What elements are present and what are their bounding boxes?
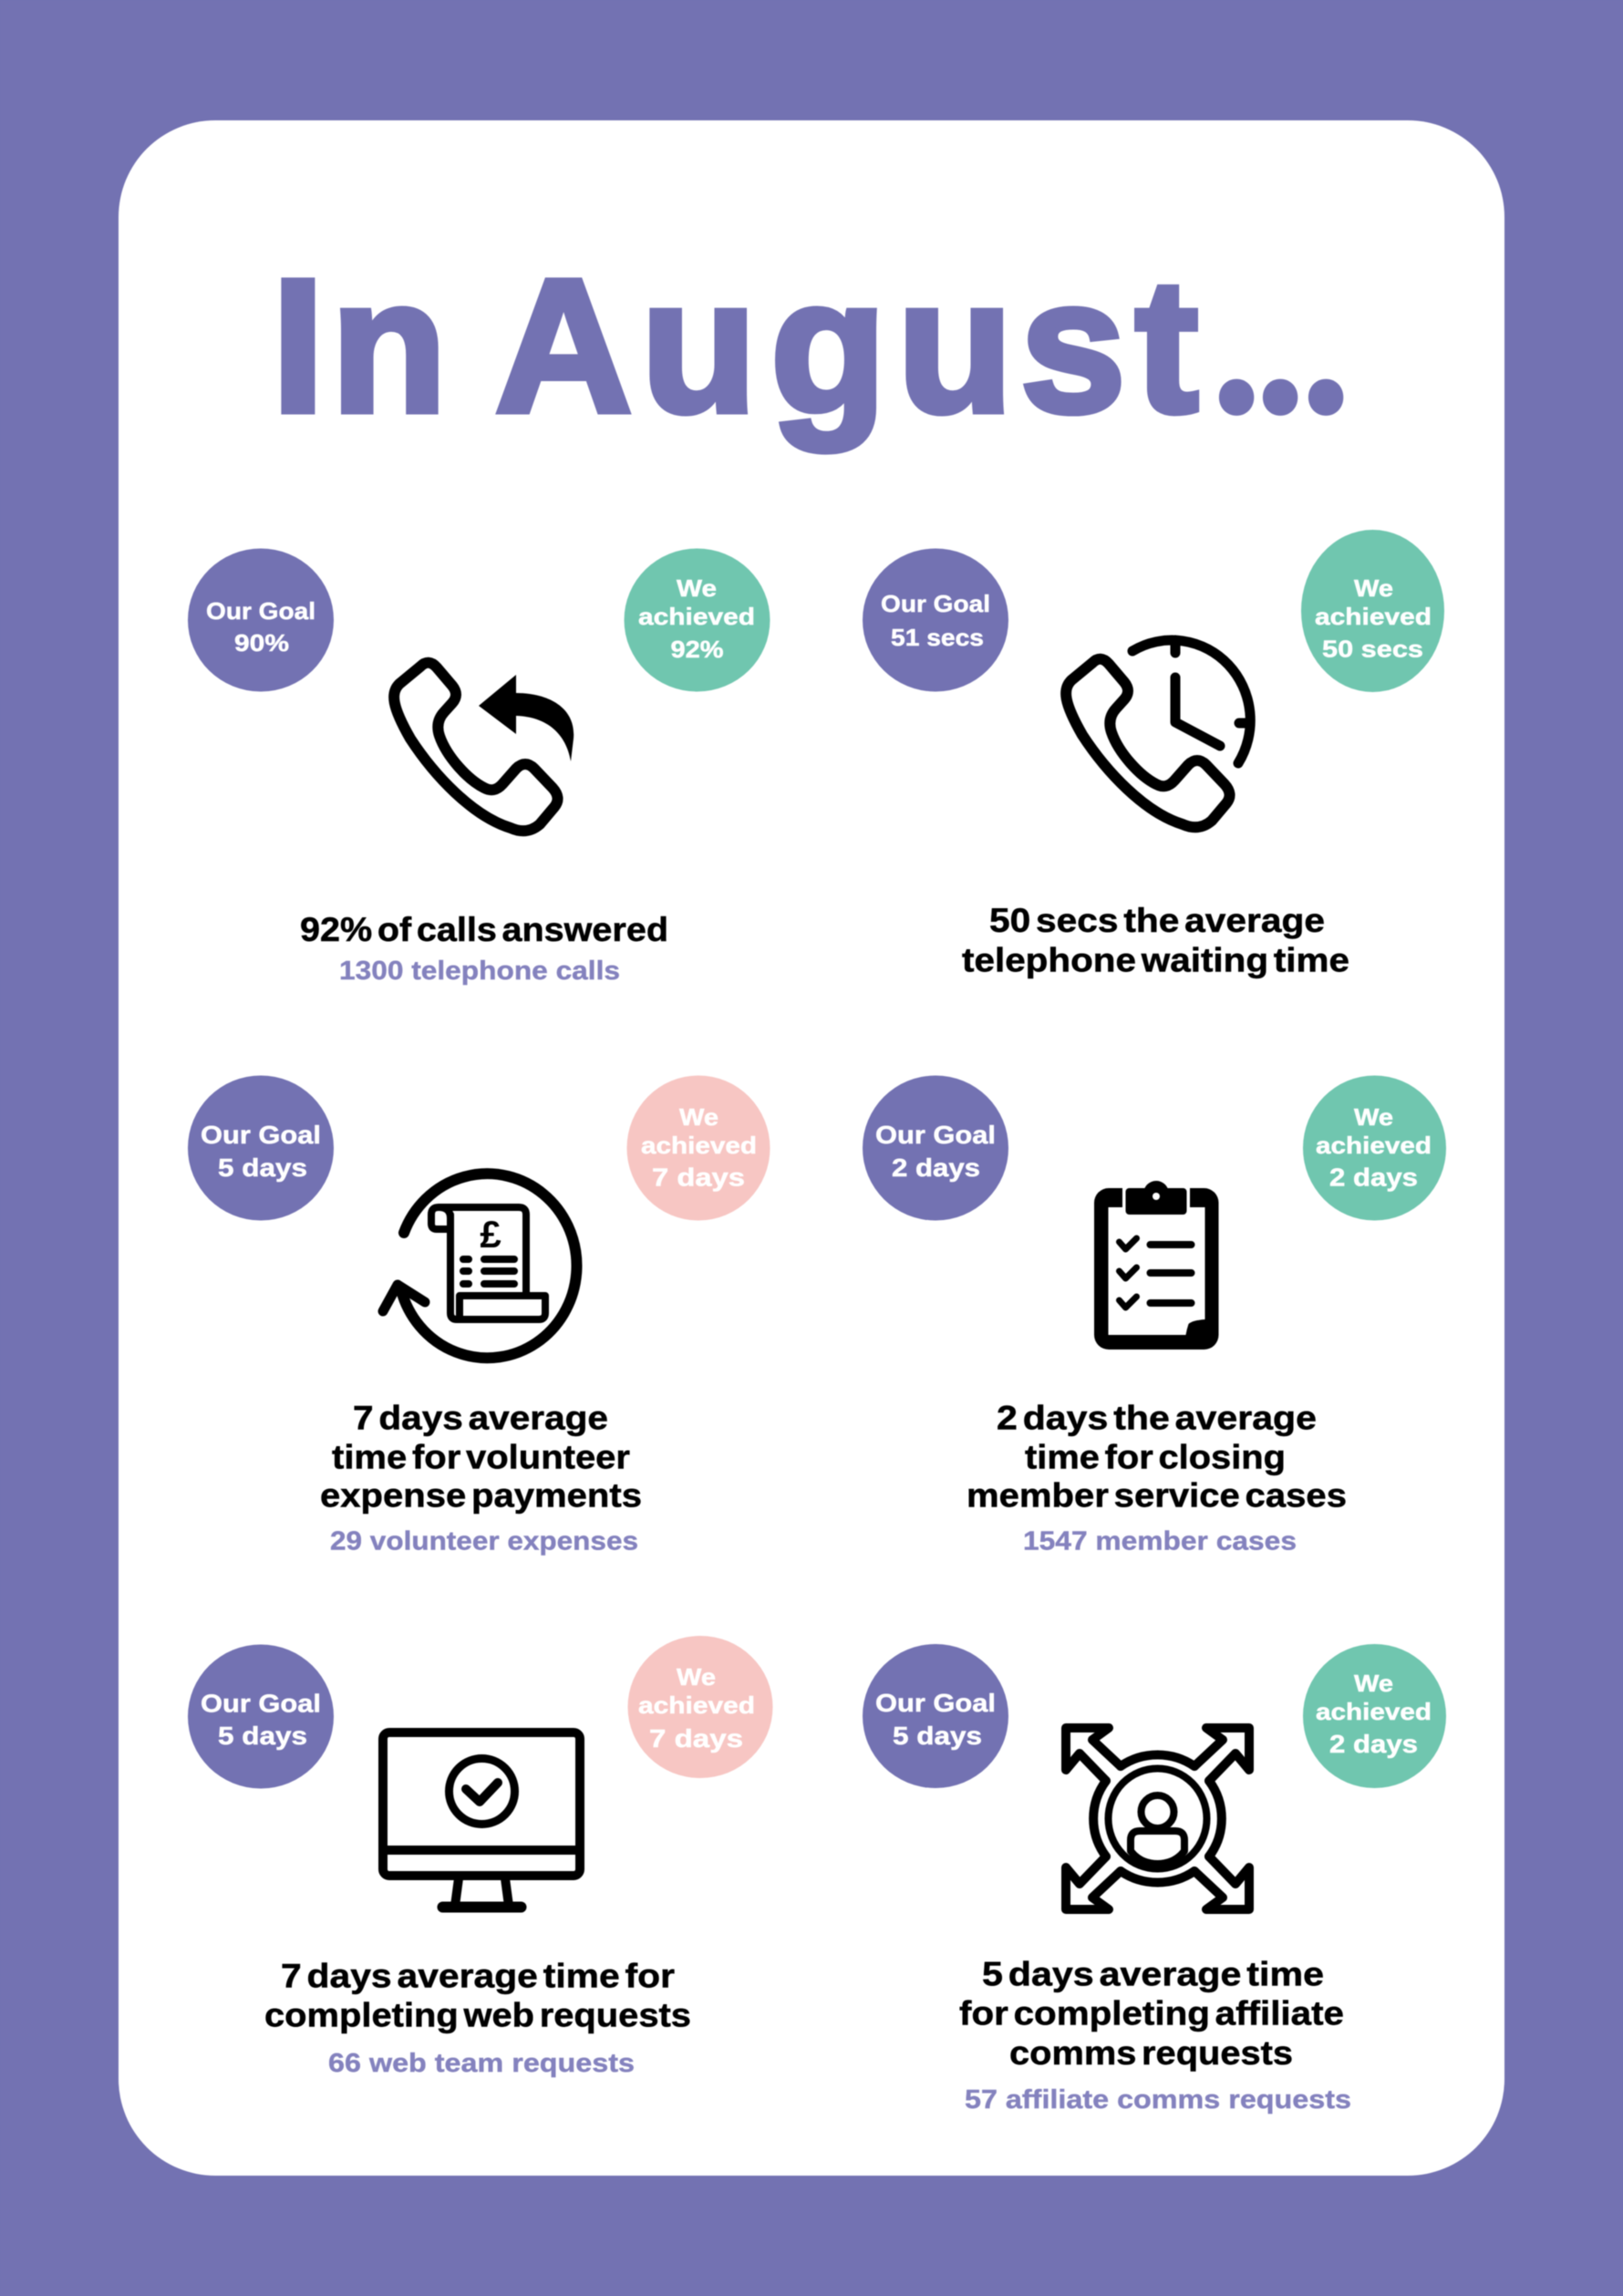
heading: affiliate comms requests: comms requests: [1009, 2034, 1293, 2072]
achieved badge: 50 secs: We: [1354, 574, 1393, 602]
icon: phone with clock: [1066, 640, 1250, 827]
achieved badge: 7 days: achieved: [638, 1691, 755, 1719]
heading: waiting time: telephone waiting time: [962, 941, 1349, 979]
panel: affiliate comms requests: [863, 1644, 1446, 2115]
goal badge: 90%: 90%: [234, 629, 289, 657]
icon: person with outward arrows: [1066, 1728, 1249, 1909]
achieved badge: 2 days: achieved: [1316, 1132, 1432, 1159]
icon: phone with return arrow: [394, 663, 574, 831]
achieved badge: 7 days: [627, 1636, 773, 1778]
achieved badge: 92%: [624, 549, 770, 691]
title: ...: [1205, 191, 1357, 469]
heading: volunteer expense payments: time for volunteer: [332, 1439, 630, 1475]
goal badge: 5 days: Our Goal: [201, 1121, 321, 1149]
goal badge: 5 days: Our Goal: [201, 1689, 321, 1718]
goal badge: 51 secs: Our Goal: [881, 590, 990, 617]
heading: member service cases: [967, 1399, 1347, 1514]
icon: monitor with check mark: [383, 1732, 580, 1908]
achieved badge: 92%: We: [677, 574, 717, 602]
panel: web requests: [188, 1636, 773, 2078]
achieved badge: 7 days: 7 days: [652, 1164, 745, 1191]
achieved badge: 7 days: 7 days: [649, 1724, 743, 1753]
achieved badge: 2 days: 2 days: [1329, 1730, 1418, 1758]
achieved badge: 50 secs: 50 secs: [1322, 635, 1423, 662]
icon: receipt with circular arrow: [383, 1174, 576, 1358]
goal badge: 2 days: 2 days: [892, 1153, 980, 1182]
panel: volunteer expenses: [188, 1076, 770, 1556]
achieved badge: 7 days: We: [679, 1103, 718, 1131]
title: In August: [272, 241, 1198, 452]
heading: member service cases: 2 days the average: [997, 1399, 1317, 1437]
heading: member service cases: member service cases: [967, 1477, 1347, 1514]
subtext: member cases: 1547 member cases: [1023, 1526, 1297, 1556]
goal badge: 5 days: 5 days: [218, 1722, 307, 1750]
panel: member cases: [863, 1076, 1446, 1556]
achieved badge: 50 secs: achieved: [1315, 603, 1432, 630]
panel: calls answered: [188, 549, 770, 986]
goal badge: 5 days: [188, 1076, 334, 1220]
goal badge: 5 days: [863, 1644, 1008, 1788]
goal badge: 2 days: [863, 1076, 1008, 1220]
achieved badge: 7 days: We: [677, 1663, 716, 1691]
achieved badge: 2 days: [1303, 1076, 1446, 1220]
achieved badge: 50 secs: [1301, 530, 1444, 692]
heading: volunteer expense payments: [320, 1399, 642, 1514]
goal badge: 5 days: 5 days: [893, 1722, 982, 1750]
goal badge: 2 days: Our Goal: [875, 1121, 996, 1149]
goal badge: 5 days: [188, 1645, 334, 1789]
white card: [119, 120, 1504, 2176]
heading: web requests: completing web requests: [264, 1997, 691, 2033]
heading: web requests: [264, 1957, 691, 2033]
subtext: volunteer expenses: 29 volunteer expenses: [330, 1526, 638, 1556]
goal badge: 51 secs: 51 secs: [891, 624, 984, 651]
achieved badge: 2 days: We: [1354, 1670, 1393, 1697]
subtext: affiliate comms requests: 57 affiliate comms requests: [965, 2085, 1351, 2115]
achieved badge: 92%: achieved: [638, 603, 755, 630]
achieved badge: 92%: 92%: [671, 636, 724, 663]
achieved badge: 2 days: 2 days: [1329, 1164, 1418, 1191]
subtext: telephone calls: 1300 telephone calls: [339, 957, 620, 986]
heading: volunteer expense payments: 7 days average: [353, 1399, 608, 1437]
goal badge: 51 secs: [863, 549, 1008, 691]
icon: receipt with circular arrow: £: [480, 1213, 501, 1256]
heading: waiting time: 50 secs the average: [989, 902, 1325, 939]
achieved badge: 7 days: [627, 1076, 770, 1220]
panel: waiting time: [863, 530, 1444, 979]
achieved badge: 2 days: We: [1354, 1103, 1393, 1131]
achieved badge: 2 days: achieved: [1316, 1698, 1432, 1725]
subtext: web team requests: 66 web team requests: [328, 2049, 635, 2078]
heading: affiliate comms requests: [959, 1955, 1344, 2072]
icon: clipboard checklist: [1094, 1181, 1218, 1350]
heading: member service cases: time for closing: [1025, 1439, 1286, 1475]
goal badge: 90%: Our Goal: [206, 597, 315, 625]
goal badge: 5 days: Our Goal: [875, 1689, 996, 1717]
heading: affiliate comms requests: for completing affiliate: [959, 1995, 1344, 2032]
heading: web requests: 7 days average time for: [281, 1957, 675, 1995]
heading: volunteer expense payments: expense payments: [320, 1477, 642, 1514]
heading: waiting time: [962, 902, 1349, 979]
heading: affiliate comms requests: 5 days average time: [982, 1955, 1324, 1993]
achieved badge: 2 days: [1303, 1644, 1446, 1788]
heading: calls answered: 92% of calls answered: [300, 911, 668, 948]
goal badge: 5 days: 5 days: [218, 1153, 307, 1182]
achieved badge: 7 days: achieved: [641, 1132, 757, 1159]
goal badge: 90%: [188, 549, 334, 691]
